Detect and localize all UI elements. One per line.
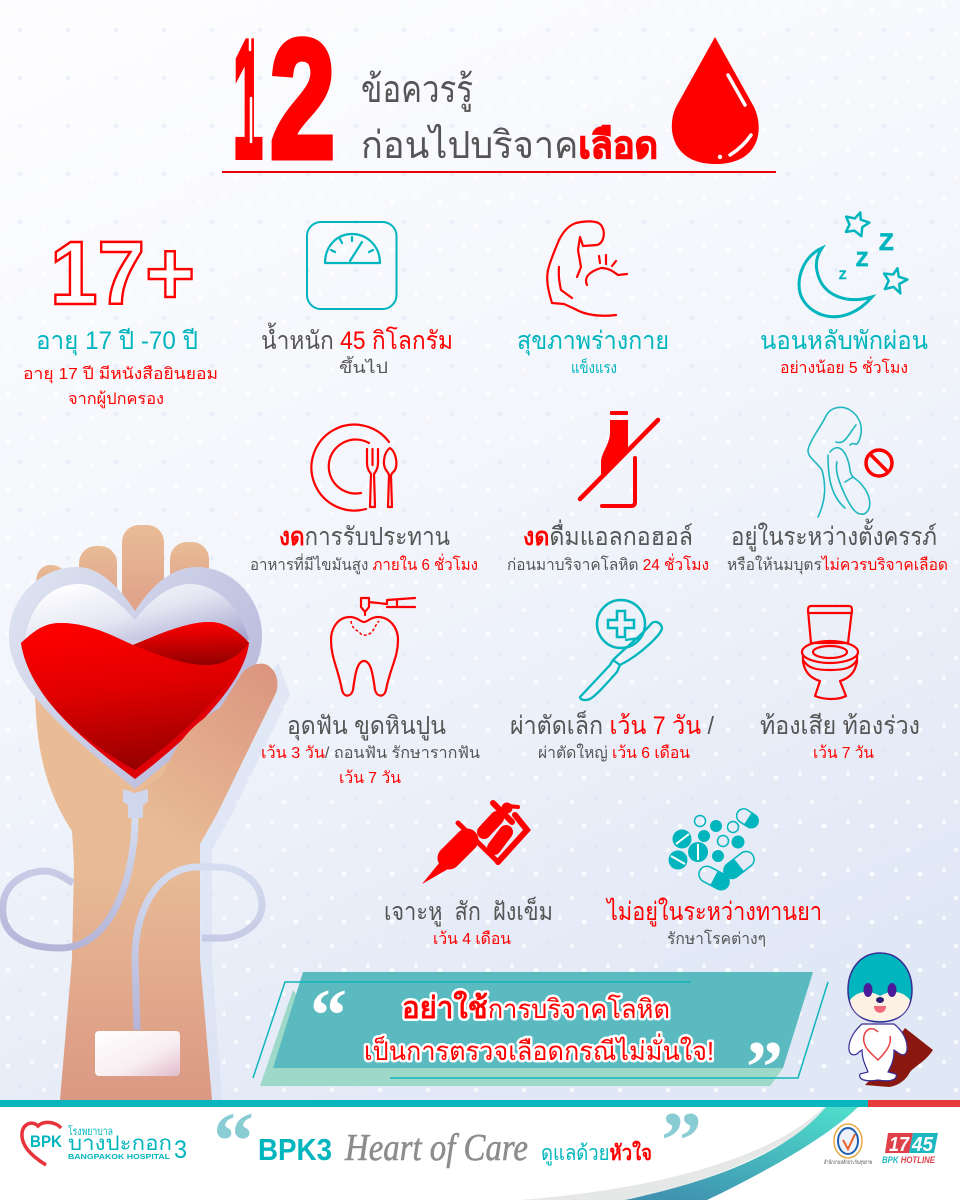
item: alcohol (507, 411, 709, 574)
sleep heading: นอนหลับพักผ่อน (760, 327, 928, 355)
callout line two: เป็นการตรวจเลือดกรณีไม่มั่นใจ! (364, 1033, 714, 1066)
item: age (23, 224, 218, 409)
diarrhea heading: ท้องเสีย ท้องร่วง (760, 712, 920, 740)
weight note: ขึ้นไป (339, 356, 388, 377)
mascot (848, 953, 933, 1087)
icon: flexed arm (547, 221, 627, 316)
sleep note: อย่างน้อย 5 ชั่วโมง (780, 356, 908, 377)
dental note line two: เว้น 7 วัน (339, 769, 401, 787)
piercing note: เว้น 4 เดือน (433, 930, 511, 948)
quality seal logo (824, 1124, 872, 1166)
icon: tattoo machine (422, 803, 527, 884)
item: medication (605, 806, 822, 948)
icon: moon and stars (799, 210, 909, 317)
item: weight (261, 222, 453, 377)
icon: weighing scale (307, 222, 396, 309)
hotline logo: 45 (911, 1134, 934, 1156)
title number 12: 2 (270, 5, 335, 193)
item: pregnancy (727, 407, 948, 575)
icon: crossed bottle (580, 411, 658, 506)
callout banner (253, 972, 828, 1109)
age note line one: อายุ 17 ปี มีหนังสือยินยอม (23, 365, 218, 384)
item: piercing tattoo (384, 803, 553, 948)
title line one: ข้อควรรู้ (361, 69, 473, 112)
footer (0, 1095, 960, 1200)
title line two: ก่อนไปบริจาคเลือด (361, 124, 658, 167)
pregnancy heading: อยู่ในระหว่างตั้งครรภ์ (731, 518, 937, 552)
slogan script: Heart of Care (344, 1127, 528, 1169)
hospital logo: 3 (174, 1136, 187, 1164)
icon: blood drop (672, 37, 759, 164)
arm shadow (200, 662, 290, 1100)
callout line one: อย่าใช้การบริจาคโลหิต (402, 990, 670, 1025)
dental heading: อุดฟัน ขูดหินปูน (287, 712, 446, 741)
alcohol note: ก่อนมาบริจาคโลหิต 24 ชั่วโมง (507, 553, 709, 574)
pregnancy note: หรือให้นมบุตรไม่ควรบริจาคเลือด (727, 555, 948, 575)
hospital logo (22, 1122, 187, 1165)
hospital logo: บางปะกอก (68, 1133, 172, 1155)
fingers (30, 525, 209, 645)
quality seal logo: สำนักงานหลักประกันสุขภาพ (824, 1159, 872, 1166)
hotline logo: 17 (889, 1134, 910, 1156)
diarrhea note: เว้น 7 วัน (813, 744, 874, 762)
icon: scalpel and cross (580, 600, 662, 700)
footer opening quote: “ (213, 1095, 254, 1186)
title (233, 5, 658, 193)
health heading: สุขภาพร่างกาย (517, 327, 669, 356)
icon: tooth and drill (331, 598, 415, 696)
icon: toilet (802, 606, 858, 699)
item: dental (261, 598, 480, 787)
item: fatty food (250, 425, 478, 575)
thumb (125, 664, 277, 850)
footer swoosh (520, 1107, 858, 1200)
age note line two: จากผู้ปกครอง (68, 390, 164, 409)
icon: moon and stars: Z (879, 229, 894, 256)
piercing heading: เจาะหู สัก ฝังเข็ม (384, 896, 553, 927)
icon: 17+: 17+ (50, 224, 195, 324)
item: healthy body (517, 221, 669, 377)
tube two (135, 867, 262, 1030)
age heading: อายุ 17 ปี -70 ปี (36, 327, 198, 356)
footer stripe (0, 1100, 875, 1107)
arm (35, 690, 212, 1100)
footer closing quote: ” (661, 1095, 702, 1186)
opening quote mark: “ (310, 975, 347, 1057)
item: surgery (510, 600, 714, 762)
icon: moon and stars: Z (856, 249, 868, 271)
medication heading: ไม่อยู่ในระหว่างทานยา (605, 897, 822, 927)
health note: แข็งแรง (571, 357, 617, 377)
icon: pills (668, 806, 761, 893)
item: diarrhea (760, 606, 920, 762)
food note: อาหารที่มีไขมันสูง ภายใน 6 ชั่วโมง (250, 553, 478, 575)
slogan: BPK3 (258, 1132, 332, 1167)
tube one (3, 818, 135, 948)
slogan thai: ดูแลด้วยหัวใจ (541, 1140, 652, 1166)
heart bag (9, 567, 262, 789)
weight heading: น้ำหนัก 45 กิโลกรัม (261, 322, 453, 355)
item: sleep (760, 210, 928, 377)
food heading: งดการรับประทาน (279, 523, 450, 551)
medical tape (95, 1031, 180, 1076)
title number 12: 1 (233, 5, 263, 193)
icon: plate fork spoon (311, 425, 396, 511)
medication note: รักษาโรคต่างๆ (667, 929, 766, 948)
surgery heading: ผ่าตัดเล็ก เว้น 7 วัน / (510, 710, 714, 740)
closing quote mark: ” (746, 1027, 783, 1109)
illustration: hand holding heart blood bag (3, 525, 290, 1100)
icon: moon and stars: Z (839, 268, 846, 282)
surgery note: ผ่าตัดใหญ่ เว้น 6 เดือน (538, 743, 690, 762)
icon: pregnant woman (808, 407, 892, 517)
hotline logo (882, 1133, 938, 1165)
title underline (222, 171, 776, 173)
alcohol heading: งดดื่มแอลกอฮอล์ (523, 519, 693, 551)
hotline logo: BPK HOTLINE (882, 1155, 936, 1165)
hospital logo: BPK (30, 1132, 63, 1151)
hospital logo: BANGPAKOK HOSPITAL (68, 1152, 170, 1161)
bag connector (123, 789, 148, 818)
dental note line one: เว้น 3 วัน/ ถอนฟัน รักษารากฟัน (261, 744, 480, 762)
hospital logo: โรงพยาบาล (68, 1124, 113, 1138)
